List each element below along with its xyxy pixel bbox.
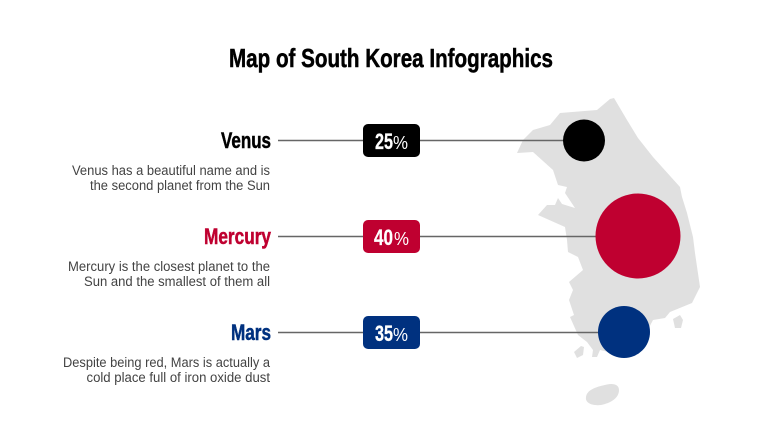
value: 25 — [375, 129, 393, 154]
island: Jeju — [586, 384, 619, 405]
heading: Venus — [221, 128, 271, 153]
percentage badge — [363, 220, 420, 253]
percentage badge — [363, 316, 420, 349]
connector line — [278, 140, 570, 142]
heading: Mars — [231, 320, 271, 345]
description: the second planet from the Sun — [90, 178, 270, 193]
row: Mars — [63, 306, 650, 385]
island: Geoje — [673, 315, 683, 328]
row: Venus — [72, 120, 605, 193]
marker circle — [596, 194, 680, 278]
percentage badge — [363, 124, 420, 157]
value: % — [393, 133, 408, 153]
marker circle — [598, 306, 650, 358]
value: % — [394, 229, 409, 249]
mainland — [517, 98, 700, 357]
value: 40 — [374, 225, 393, 250]
connector line — [278, 332, 602, 334]
description: Sun and the smallest of them all — [84, 274, 270, 289]
marker circle — [563, 120, 605, 162]
row: Mercury — [68, 194, 680, 289]
heading: Mercury — [204, 224, 272, 249]
value: 35 — [375, 321, 393, 346]
description: cold place full of iron oxide dust — [86, 370, 270, 385]
description: Despite being red, Mars is actually a — [63, 355, 270, 370]
title: Map of South Korea Infographics — [229, 43, 553, 73]
description: Venus has a beautiful name and is — [72, 163, 270, 178]
value: % — [393, 325, 408, 345]
description: Mercury is the closest planet to the — [68, 259, 270, 274]
island: southwest — [574, 346, 584, 358]
map of South Korea — [517, 98, 700, 405]
connector line — [278, 236, 600, 238]
